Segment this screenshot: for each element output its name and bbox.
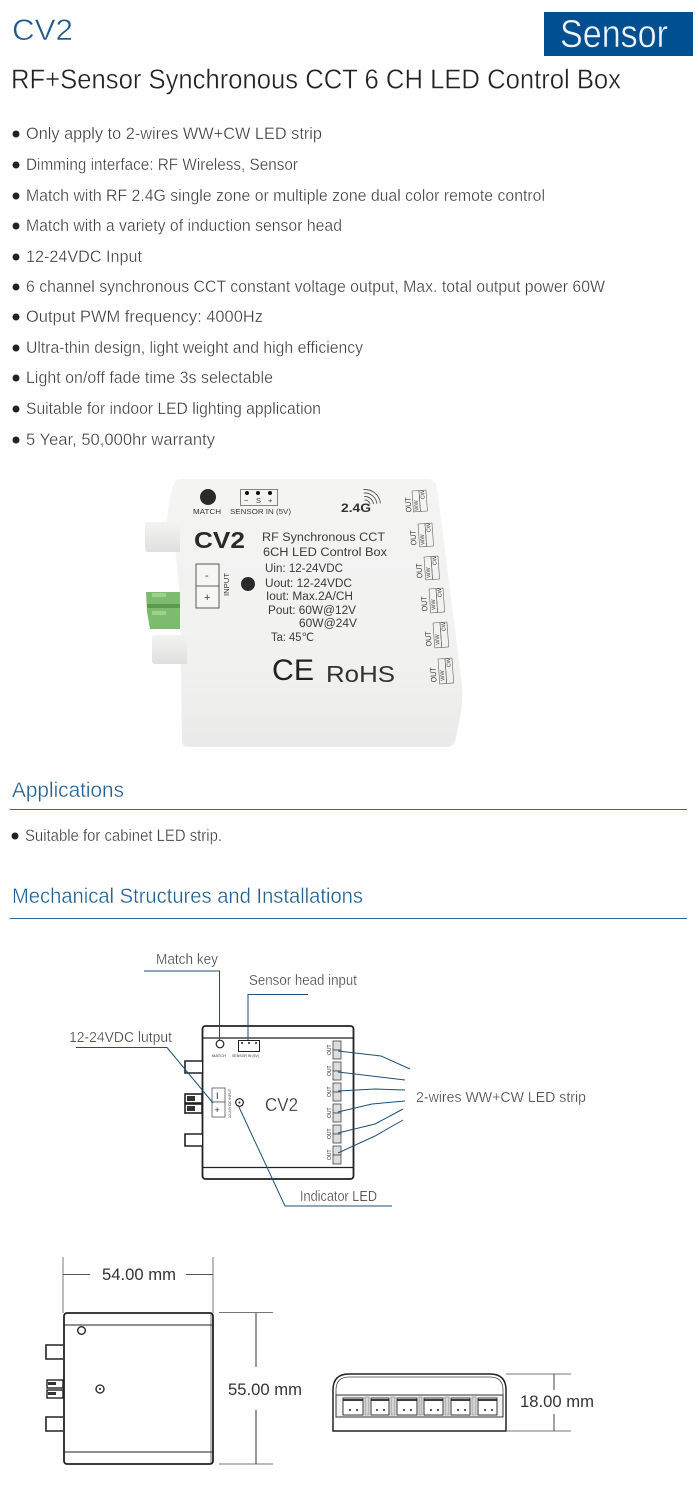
output labels: WW (440, 669, 447, 681)
panel print: RoHS (326, 661, 395, 687)
panel print: + (268, 496, 273, 505)
housing (167, 479, 462, 747)
device outline: I (216, 1091, 219, 1101)
output labels: WW (435, 633, 442, 645)
dimension: 54.00 mm (63, 1257, 213, 1313)
feature list: 12-24VDC Input (26, 248, 142, 266)
device outline: 12-24V DC INPUT (228, 1088, 232, 1118)
label: Indicator LED (238, 1105, 392, 1206)
output labels: WW (420, 533, 426, 545)
label: Match key: Match key (156, 952, 219, 968)
panel print: Ta: 45℃ (271, 632, 314, 644)
dimension: 18.00 mm: 18.00 mm (520, 1392, 594, 1411)
panel print: 6CH LED Control Box (263, 547, 387, 559)
output labels: WW (431, 598, 437, 610)
panel print: − (244, 496, 249, 505)
output labels: OUT (429, 667, 439, 683)
connector OUT labels: OUT (327, 1086, 333, 1097)
device outline: SENSOR IN (5V) (232, 1053, 260, 1058)
feature list: Output PWM frequency: 4000Hz (26, 308, 263, 326)
connector OUT labels: OUT (327, 1044, 333, 1055)
feature list (12, 125, 605, 449)
body (46, 1313, 213, 1464)
output labels: CW (437, 587, 444, 597)
panel print: CV2 (194, 527, 245, 553)
diagram: side view (333, 1374, 594, 1431)
label: Sensor head input (248, 973, 357, 1040)
device outline: + (214, 1105, 220, 1115)
diagram: labelled top view (69, 952, 586, 1206)
panel print: Uout: 12-24VDC (265, 578, 352, 590)
body (333, 1374, 506, 1431)
device outline: CV2 (265, 1095, 298, 1115)
device outline (185, 1026, 354, 1179)
output labels: CW (441, 621, 448, 631)
output labels: CW (420, 489, 427, 499)
panel print: + (204, 592, 210, 604)
panel print: Iout: Max.2A/CH (266, 591, 353, 603)
title: CV2: CV2 (12, 14, 73, 47)
badge: Sensor: Sensor (560, 13, 668, 56)
connector OUT labels: OUT (327, 1107, 333, 1118)
heading: Applications: Applications (12, 778, 124, 802)
panel print: MATCH (193, 507, 221, 516)
label: 2-wires WW+CW LED strip: 2-wires WW+CW LED strip (416, 1090, 586, 1106)
connector OUT labels: OUT (327, 1128, 333, 1139)
feature list: Only apply to 2-wires WW+CW LED strip (26, 125, 322, 143)
panel print: 60W@24V (299, 618, 357, 630)
output labels: OUT (420, 596, 430, 612)
tabs and terminal (145, 522, 187, 664)
connector OUT labels: OUT (327, 1065, 333, 1076)
output labels: OUT (414, 563, 424, 579)
connectors (343, 1398, 497, 1415)
label: Match key (144, 952, 220, 1040)
connector OUT labels: OUT (327, 1149, 333, 1160)
panel print: Uin: 12-24VDC (265, 563, 343, 575)
dimension: 54.00 mm: 54.00 mm (102, 1265, 176, 1284)
feature list: Light on/off fade time 3s selectable (26, 369, 273, 387)
label: Indicator LED: Indicator LED (300, 1189, 377, 1205)
panel print (193, 488, 395, 687)
output labels: OUT (424, 631, 434, 647)
feature list: 5 Year, 50,000hr warranty (26, 431, 216, 449)
dimension: 55.00 mm (219, 1312, 302, 1464)
device outline: MATCH (212, 1053, 226, 1058)
feature list: Suitable for indoor LED lighting application (26, 400, 321, 418)
output labels: OUT (403, 497, 413, 513)
panel print: - (205, 570, 209, 582)
feature list: Dimming interface: RF Wireless, Sensor (26, 156, 298, 174)
label: Sensor head input: Sensor head input (249, 973, 357, 989)
output labels: CW (426, 522, 433, 532)
output connectors (333, 1041, 341, 1164)
output labels: WW (414, 499, 420, 511)
panel print: SENSOR IN (5V) (230, 507, 292, 516)
label: 12-24VDC lutput: 12-24VDC lutput (69, 1030, 172, 1046)
product photo: control box (145, 479, 462, 747)
output labels: WW (426, 566, 432, 578)
label: 12-24VDC lutput (69, 1030, 213, 1103)
panel print: S (256, 496, 261, 505)
dimension: 18.00 mm (506, 1374, 594, 1431)
heading: Mechanical Structures and Installations: Mechanical Structures and Installations (12, 884, 363, 908)
feature list: Match with a variety of induction sensor head (26, 217, 342, 235)
output labels: CW (446, 657, 453, 667)
connector OUT labels (327, 1044, 333, 1160)
feature list: 6 channel synchronous CCT constant voltage output, Max. total output power 60W (26, 278, 605, 296)
feature list: Ultra-thin design, light weight and high efficiency (26, 339, 364, 357)
output labels: CW (432, 555, 439, 565)
application item: Suitable for cabinet LED strip. (25, 827, 222, 845)
panel print: CE (272, 654, 314, 687)
panel print: RF Synchronous CCT (262, 532, 385, 544)
feature list: Match with RF 2.4G single zone or multiple zone dual color remote control (26, 187, 545, 205)
label: 2-wires WW+CW LED strip (338, 1051, 586, 1153)
panel print: Pout: 60W@12V (268, 605, 356, 617)
output labels (403, 489, 454, 685)
panel print: 2.4G (341, 501, 371, 515)
diagram: dimension top view (46, 1257, 302, 1464)
output labels: OUT (408, 530, 418, 546)
subtitle: RF+Sensor Synchronous CCT 6 CH LED Control Box (11, 64, 621, 94)
dimension: 55.00 mm: 55.00 mm (228, 1380, 302, 1399)
panel print: INPUT (222, 573, 231, 596)
